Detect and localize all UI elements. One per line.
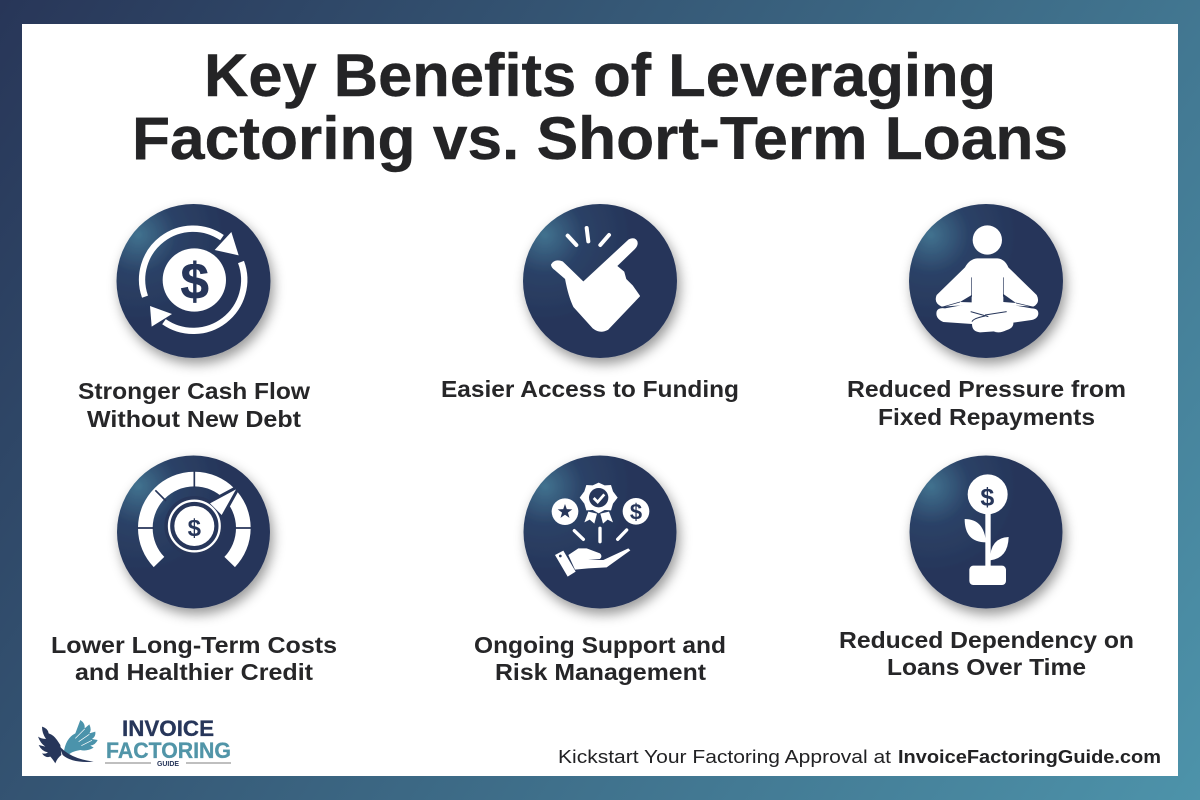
benefit label: cash flow: Without New Debt [87, 406, 301, 432]
icon: speedometer with dollar [117, 456, 270, 608]
icon: cash flow cycle with dollar [116, 204, 270, 358]
title: Factoring vs. Short-Term Loans [132, 105, 1068, 172]
logo: Invoice Factoring Guide: FACTORING [106, 738, 231, 763]
title [132, 42, 1068, 172]
benefit label: reduced pressure: Fixed Repayments [878, 404, 1095, 430]
benefit label: ongoing support: Ongoing Support and [474, 632, 726, 658]
logo: Invoice Factoring Guide [38, 716, 231, 768]
logo: Invoice Factoring Guide: GUIDE [157, 761, 179, 768]
benefit label: reduced dependency: Loans Over Time [887, 654, 1086, 680]
icon: money plant in pot [910, 456, 1062, 608]
benefit label: cash flow: Stronger Cash Flow [78, 378, 310, 404]
benefit label: reduced pressure: Reduced Pressure from [847, 376, 1126, 402]
title: Key Benefits of Leveraging [204, 42, 996, 109]
icon: finger snap [523, 204, 677, 358]
icon: hand with rewards [524, 456, 676, 608]
icon: cash flow cycle with dollar: $ [181, 253, 209, 310]
icon: money plant in pot: $ [980, 484, 994, 512]
benefit label: lower costs: and Healthier Credit [75, 659, 313, 685]
logo: Invoice Factoring Guide: INVOICE [122, 716, 214, 741]
benefit label: funding access: Easier Access to Funding [441, 376, 739, 402]
footer call to action: InvoiceFactoringGuide.com [898, 747, 1161, 767]
footer call to action [558, 747, 1161, 767]
benefit label: reduced dependency [839, 627, 1134, 680]
icon: meditating person [909, 204, 1063, 358]
benefit label: lower costs: Lower Long-Term Costs [51, 632, 337, 658]
benefit label: ongoing support [474, 632, 726, 685]
footer call to action: Kickstart Your Factoring Approval at [558, 747, 891, 767]
icon: logo wing [38, 720, 98, 763]
benefit label: reduced pressure [847, 376, 1126, 430]
benefit label: reduced dependency: Reduced Dependency on [839, 627, 1134, 653]
benefit label: ongoing support: Risk Management [495, 659, 706, 685]
icon: hand with rewards: $ [630, 500, 642, 525]
benefit label: cash flow [78, 378, 310, 432]
icon: speedometer with dollar: $ [188, 515, 201, 542]
benefit label: lower costs [51, 632, 337, 685]
